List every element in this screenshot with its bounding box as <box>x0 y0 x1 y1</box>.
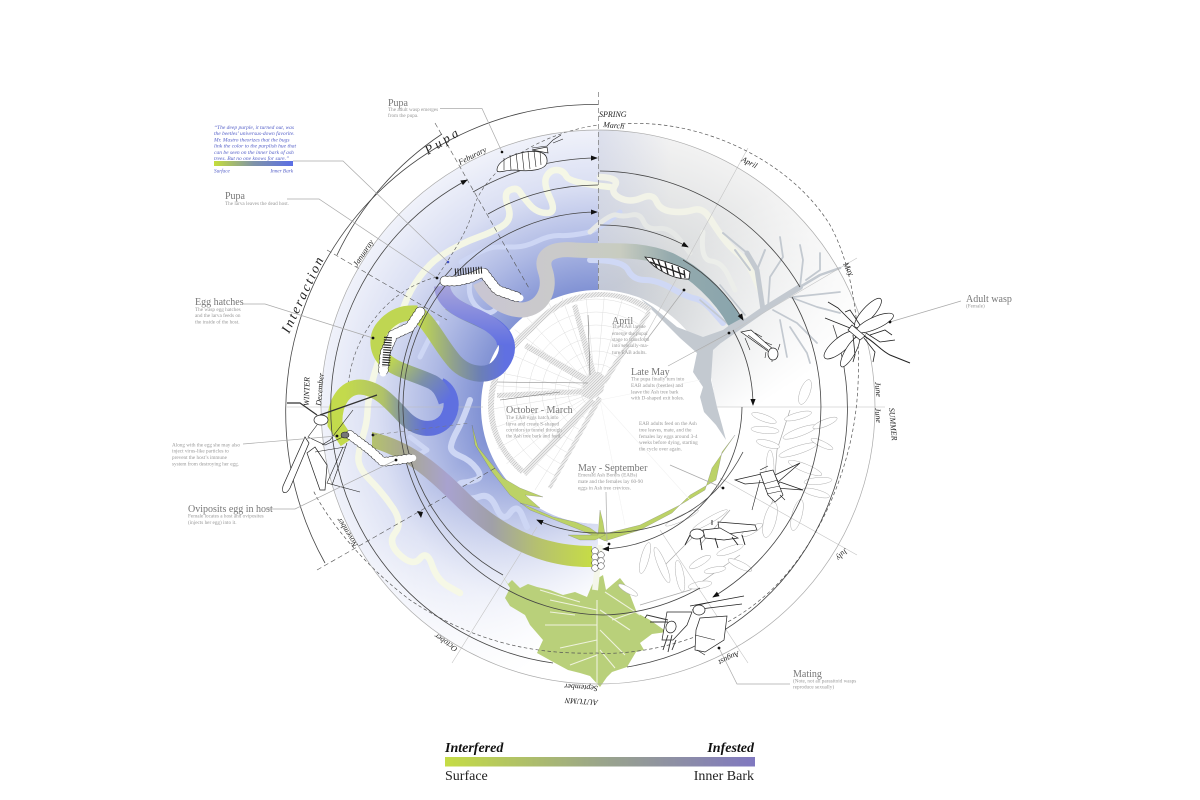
legend: interfered to infested scale: Inner Bark <box>694 769 754 784</box>
month and season labels: Pupa <box>421 123 464 158</box>
month and season labels: April <box>739 154 760 171</box>
text: Late May stage: Late May <box>631 367 670 378</box>
month and season labels: Interaction <box>278 253 327 336</box>
callout: Adult wasp: Adult wasp <box>966 294 1012 305</box>
callout: Oviposits egg in host: (injects her egg) into it. <box>188 519 237 526</box>
text: EAB adults stage <box>639 420 724 489</box>
text: May to September stage: Emerald Ash Borers (EABs) <box>578 472 637 478</box>
text: April stage: into sexually-ma- <box>612 343 649 349</box>
callout: colour quote with scale: link the color to the purplish hue that <box>214 144 297 150</box>
serpentine host ribbons <box>335 250 735 567</box>
month and season labels: SUMMER <box>887 407 899 441</box>
callout: colour quote with scale: can be seen on the inner bark of ash <box>214 149 294 156</box>
callout: colour quote with scale: Mr. Mastro theorizes that the bugs <box>213 137 290 143</box>
callout: Pupa larva leaves host: The larva leaves the dead host. <box>225 201 289 207</box>
month and season labels: WINTER <box>302 377 312 406</box>
callout: Mating: reproduce sexually) <box>793 684 834 690</box>
month and season labels: March <box>602 120 625 131</box>
callout: Pupa adult wasp emerges: from the pupa. <box>388 112 418 119</box>
callout: virus-like particles <box>172 423 470 467</box>
text: EAB adults stage: EAB adults feed on the Ash <box>639 420 697 427</box>
month and season labels: June <box>873 381 883 398</box>
leaf diagram in inner circle <box>488 292 652 490</box>
callout: Mating: (Note, not all parasitoid wasps <box>793 678 856 684</box>
legend: interfered to infested scale <box>444 741 755 784</box>
month and season labels: October <box>432 631 459 654</box>
callout: Egg hatches: The wasp egg hatches <box>195 307 241 313</box>
icon: adult beetle emerging <box>741 330 780 362</box>
text: Late May stage: with D-shaped exit holes. <box>631 396 684 402</box>
callout: colour quote with scale: the beetles’ universus-down favorite. <box>214 130 295 137</box>
grey pupal gallery tree <box>640 233 840 440</box>
callout: colour quote with scale: “The deep purple, it turned out, was <box>214 124 294 131</box>
callout: colour quote with scale: trees. But no one knows for sure.” <box>214 155 289 162</box>
callout: Pupa adult wasp emerges: The adult wasp emerges <box>388 107 438 113</box>
ash leaf outlines <box>617 378 838 605</box>
larva: newly hatched egg stage <box>350 435 413 462</box>
text: October to March stage: October - March <box>506 405 573 416</box>
inner circle faint rays <box>600 380 700 525</box>
legend: interfered to infested scale: Infested <box>706 741 755 756</box>
text: EAB adults stage: tree leaves, mate, and the <box>639 428 692 434</box>
larval gallery meanders <box>358 170 760 593</box>
text: October to March stage: The EAB eggs hatch into <box>506 415 559 421</box>
callout: colour quote with scale <box>213 124 449 263</box>
text: May to September stage: mate and the females lay 60-90 <box>578 478 643 485</box>
month and season labels: August <box>716 649 742 667</box>
month and season labels: September <box>563 682 598 693</box>
callout: virus-like particles: Along with the egg she may also <box>172 442 240 448</box>
month and season labels: December <box>314 372 326 407</box>
text: Late May stage: The pupa finally turn into <box>631 376 685 382</box>
text: April stage: ture EAB adults. <box>612 350 647 356</box>
callout: Oviposits egg in host: Female locates a host and oviposites <box>188 514 264 520</box>
callout: Pupa adult wasp emerges <box>388 98 503 153</box>
callout: Egg hatches: and the larva feeds on <box>195 312 241 319</box>
larva: feeding inside the host <box>383 312 420 373</box>
text: EAB adults stage: weeks before dying, starting <box>639 439 698 446</box>
guide lines and month dividers <box>287 92 885 663</box>
text: October to March stage: the Ash tree bark and feed. <box>506 432 562 440</box>
larva: pupa stage near top left <box>445 270 520 298</box>
month and season labels: Januaray <box>351 238 376 268</box>
month and season labels: SPRING <box>599 110 627 119</box>
month and season labels <box>278 110 899 707</box>
callout: Adult wasp <box>889 294 1012 323</box>
callout: Pupa adult wasp emerges: Pupa <box>388 98 409 109</box>
callout: virus-like particles: system from destroying her egg. <box>172 460 239 467</box>
callout: Egg hatches: the inside of the host. <box>195 318 240 326</box>
callout: Oviposits egg in host <box>188 459 397 526</box>
callout: Pupa larva leaves host <box>225 191 438 279</box>
month and season labels: November <box>334 515 360 550</box>
icon: mating beetles <box>685 520 757 550</box>
callout: Adult wasp: (Female) <box>966 302 985 310</box>
text: April stage <box>612 289 685 356</box>
arrow rings <box>286 104 875 684</box>
text: May to September stage: May - September <box>578 463 648 474</box>
month and season labels: AUTUMN <box>564 696 599 707</box>
icon: mating wasps <box>645 596 744 655</box>
callout: Pupa larva leaves host: Pupa <box>225 191 246 202</box>
month and season labels: July <box>834 547 850 563</box>
callout: virus-like particles: prevent the host’s immune <box>172 455 228 461</box>
text: April stage: The EAB larvae <box>612 324 646 330</box>
text: October to March stage: corridors to tunnel through <box>506 428 562 434</box>
text: May to September stage: eggs in Ash tree crevices. <box>578 486 631 492</box>
callout: Egg hatches: Egg hatches <box>195 297 244 308</box>
green adult leaf gallery at bottom <box>502 545 667 688</box>
icon: wasp pupa cocoon <box>497 135 563 172</box>
text: October to March stage <box>506 405 573 440</box>
background ring: infested left half <box>321 130 598 684</box>
callout: colour quote with scale: Inner Bark <box>269 168 294 174</box>
callout: colour quote with scale: Surface <box>214 168 231 174</box>
callout: Mating <box>718 647 856 690</box>
callout: Mating: Mating <box>793 669 822 680</box>
month and season labels: May <box>841 260 856 278</box>
legend: interfered to infested scale: Interfered <box>444 741 504 756</box>
text: April stage: emerge the pupal <box>612 331 648 337</box>
text: Late May stage <box>631 332 730 402</box>
callout: Egg hatches <box>195 297 374 339</box>
icon: adult female wasp <box>820 295 910 369</box>
text: May to September stage <box>578 463 648 545</box>
text: Late May stage: EAB adults (beetles) and <box>631 382 683 389</box>
text: Late May stage: leave the Ash tree bark <box>631 390 679 396</box>
text: April stage: stage to transform <box>612 336 649 343</box>
legend: interfered to infested scale: Surface <box>445 769 488 784</box>
callout: Oviposits egg in host: Oviposits egg in host <box>188 504 273 515</box>
icon: feeding winged beetle <box>735 463 803 510</box>
text: EAB adults stage: the cycle over again. <box>639 446 682 452</box>
eggs at ribbon origin <box>592 548 604 571</box>
month and season labels: Feburary <box>456 145 488 167</box>
text: April stage: April <box>612 316 633 327</box>
green leaf-feeding strip around inner circle <box>472 425 735 541</box>
text: EAB adults stage: females lay eggs around 3-4 <box>639 433 698 440</box>
background ring: grey spring quadrant <box>598 130 875 407</box>
text: October to March stage: larva and create S-shaped <box>506 422 560 428</box>
callout: virus-like particles: inject virus-like particles to <box>172 449 229 455</box>
icon: beetle pupa <box>645 257 690 279</box>
icon: parasitoid wasp ovipositing <box>283 395 377 493</box>
month and season labels: June <box>873 407 883 424</box>
